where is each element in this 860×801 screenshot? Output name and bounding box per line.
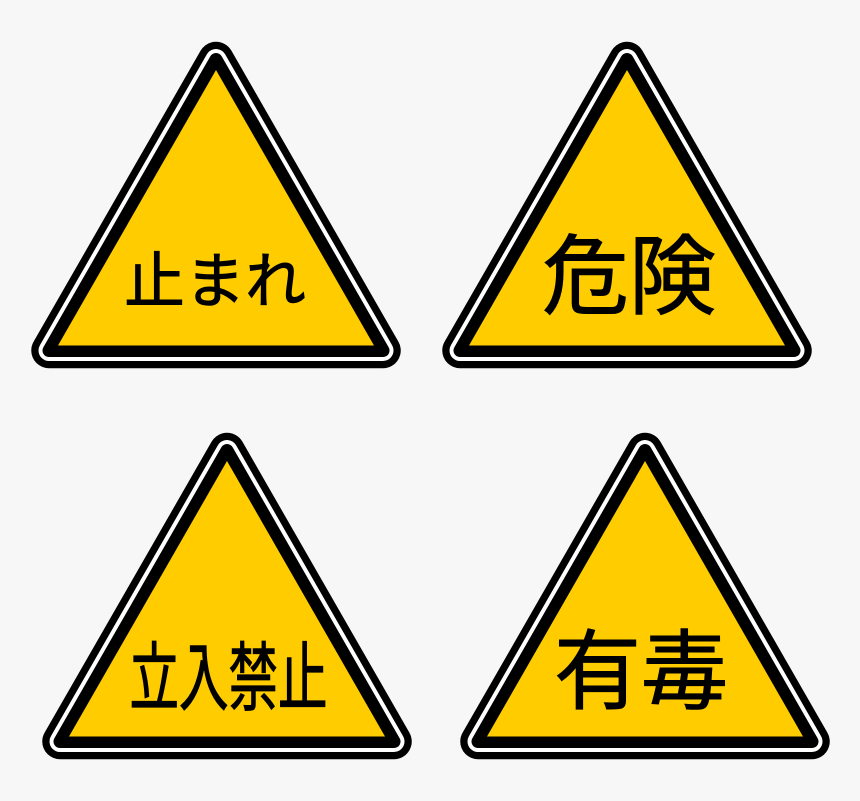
- triangle frame: no entry: [60, 450, 394, 742]
- sign text: danger: 危険: [542, 229, 716, 326]
- sign text: stop: 止まれ: [124, 247, 306, 315]
- triangle frame: stop: [49, 60, 383, 350]
- sign: danger (top right): [460, 60, 794, 350]
- sign: poison (bottom right): [478, 450, 812, 742]
- triangle frame: danger: [460, 60, 794, 350]
- sign text: poison: 有毒: [554, 624, 728, 721]
- triangle frame: poison: [478, 450, 812, 742]
- sign text: no entry: 立入禁止: [130, 638, 327, 720]
- sign: no entry (bottom left): [60, 450, 394, 742]
- sign: stop (top left): [49, 60, 383, 350]
